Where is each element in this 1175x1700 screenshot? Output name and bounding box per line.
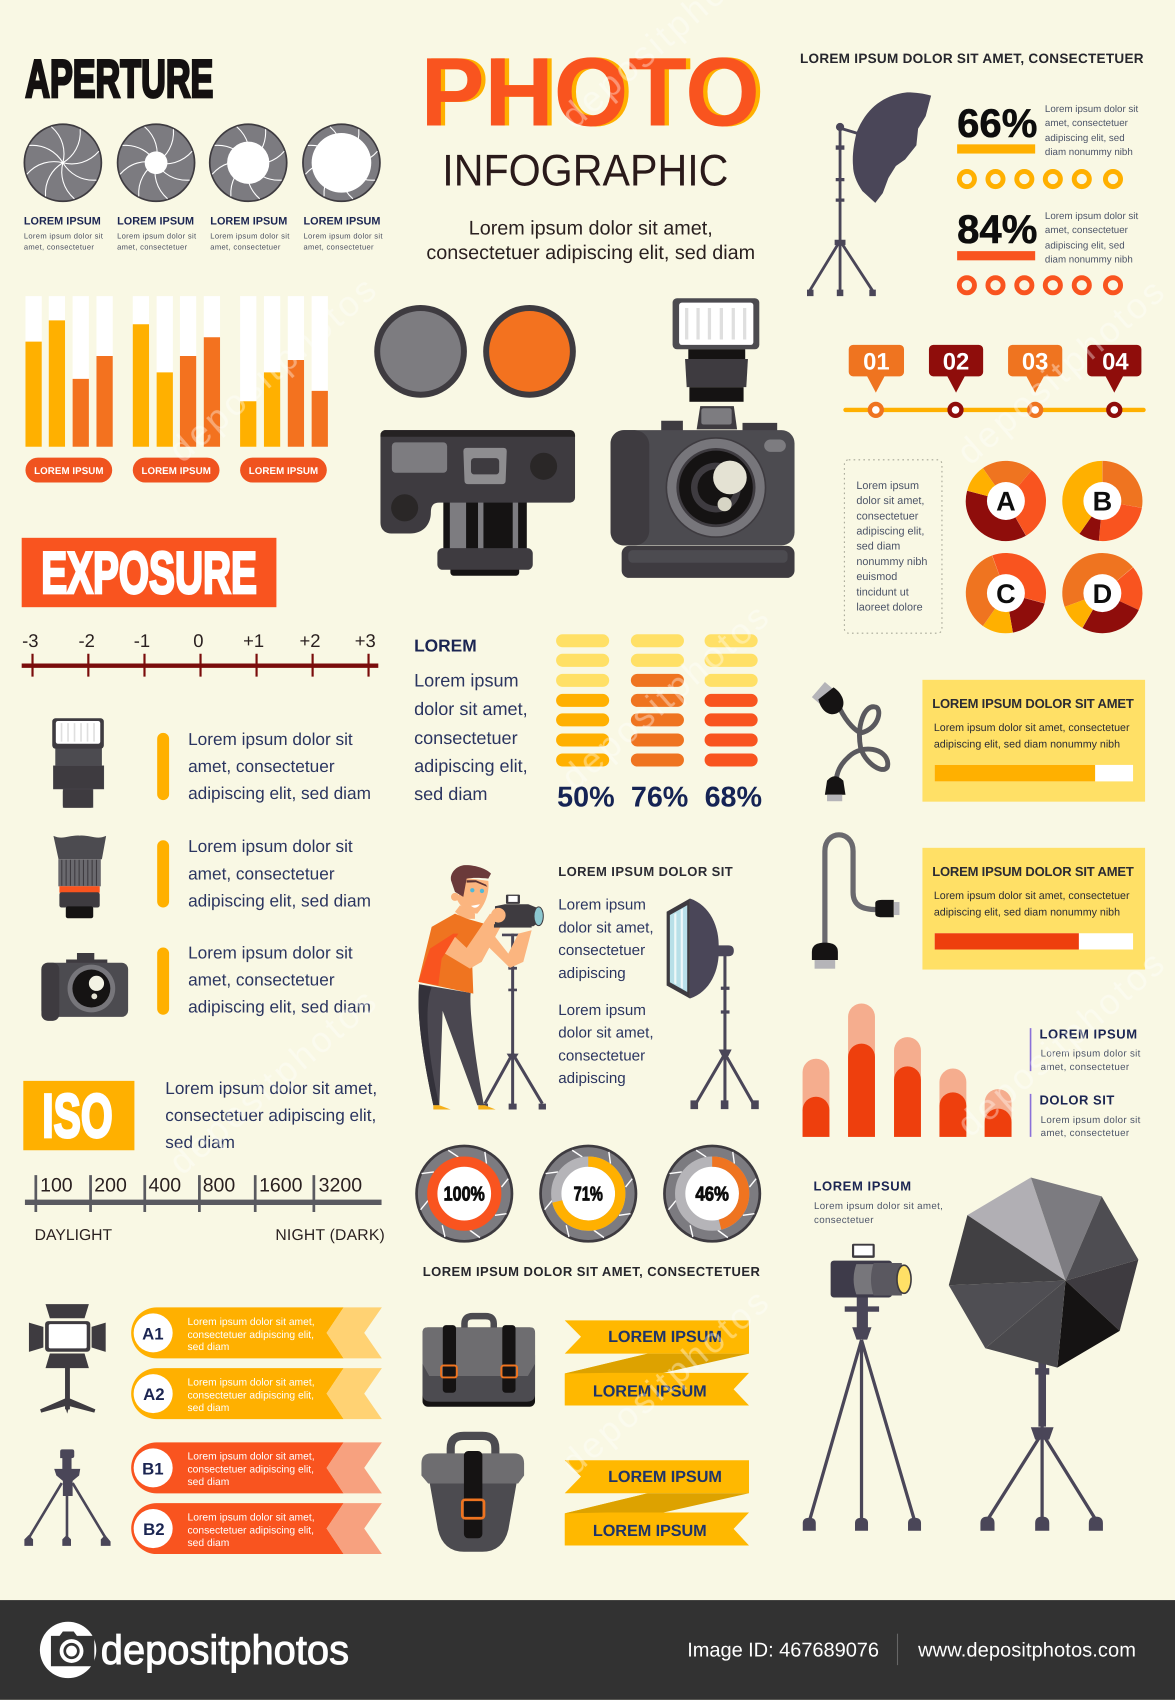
gauge 46%: 46% [695, 1182, 729, 1205]
watermarks: depositphotos [949, 943, 1171, 1144]
caption under gauges: LOREM IPSUM DOLOR SIT AMET, CONSECTETUER [423, 1264, 760, 1279]
ribbon A1: A1 [142, 1325, 164, 1344]
gauge 71%: 71% [574, 1182, 603, 1205]
dotted text box: sed diam [856, 541, 900, 553]
text: photographer copy: Lorem ipsum [558, 896, 646, 913]
text: lorem block: Lorem ipsum [414, 670, 519, 691]
stat: 84%: diam nonummy nibh [1045, 254, 1133, 265]
icon: camera top view [380, 430, 575, 576]
title: INFOGRAPHIC [442, 145, 728, 195]
column 50%: 50% [557, 781, 615, 813]
dotted text box: Lorem ipsum [856, 480, 919, 492]
exposure scale: -2 [79, 631, 95, 651]
ribbon A2 [131, 1368, 382, 1419]
yellow banners: lower pair [565, 1460, 749, 1545]
bar chart group 3 [240, 296, 328, 483]
exposure scale [22, 631, 378, 677]
icon: compact camera [41, 953, 128, 1021]
yellow banners: upper pair [565, 1320, 749, 1406]
gauge 100% [417, 1146, 512, 1241]
icon: cable 1 [812, 682, 888, 801]
list: lens accessories: amet, consectetuer [188, 865, 335, 884]
heading: exposure: EXPOSURE [41, 540, 257, 606]
stat: 84%: adipiscing elit, sed [1045, 240, 1125, 251]
aperture small [118, 124, 195, 201]
dotted text box [844, 460, 942, 633]
text: camera caption [814, 1178, 943, 1225]
donut D: D [1093, 579, 1112, 609]
aperture captions: Lorem ipsum dolor sit [24, 232, 103, 241]
list: lens accessories: Lorem ipsum dolor sit [188, 731, 353, 749]
text: photographer copy: LOREM IPSUM DOLOR SIT [558, 864, 733, 879]
ISO scale: 1600 [259, 1174, 302, 1196]
dotted text box: nonummy nibh [856, 556, 927, 568]
panel: yellow progress 2 [922, 848, 1145, 970]
ribbon B2: Lorem ipsum dolor sit amet, [188, 1512, 315, 1524]
text: camera caption: LOREM IPSUM [814, 1178, 911, 1194]
image id: Image ID: 467689076 [687, 1638, 879, 1661]
ribbon A1: sed diam [188, 1342, 229, 1353]
ribbon B1: sed diam [188, 1477, 229, 1488]
heading: ISO: ISO [42, 1082, 113, 1151]
legend: Lorem ipsum dolor sit [1041, 1048, 1141, 1059]
pin 02 [929, 345, 983, 416]
icon: camera on tripod [803, 1244, 921, 1531]
aperture medium [210, 124, 287, 201]
text: photographer copy: dolor sit amet, [558, 918, 654, 936]
pin 01 [849, 345, 904, 416]
pin 04: 04 [1102, 348, 1129, 375]
panel: yellow progress 2: Lorem ipsum dolor sit amet, consectetuer [934, 890, 1130, 902]
timeline [843, 345, 1146, 416]
list: lens accessories: amet, consectetuer [188, 758, 335, 776]
aperture captions: LOREM IPSUM [304, 216, 380, 228]
title: PHOTO [421, 39, 760, 147]
panel: yellow progress 1: Lorem ipsum dolor sit amet, consectetuer [934, 722, 1130, 734]
exposure scale: 0 [193, 631, 203, 651]
ISO scale: 100 [40, 1174, 73, 1196]
donut C [965, 552, 1047, 634]
stat: 66%: adipiscing elit, sed [1045, 132, 1125, 143]
aperture captions: amet, consectetuer [24, 244, 95, 252]
text: photographer copy: Lorem ipsum [558, 1001, 646, 1018]
gauge 46% [664, 1146, 760, 1241]
ribbon A2: consectetuer adipiscing elit, [188, 1390, 314, 1402]
text: photographer copy: consectetuer [558, 941, 645, 958]
yellow banners: upper pair: LOREM IPSUM [593, 1382, 707, 1401]
dotted text box: dolor sit amet, [856, 496, 924, 507]
pin 01: 01 [863, 348, 890, 375]
ribbon B2 [131, 1503, 382, 1554]
text: photographer copy [558, 864, 733, 1086]
text: lorem block [414, 638, 528, 804]
bar chart group 2: LOREM IPSUM [141, 465, 211, 476]
exposure scale: +3 [355, 631, 376, 651]
icon: camera bag [421, 1436, 524, 1552]
ribbon A2: sed diam [188, 1402, 229, 1414]
column 68% [705, 634, 762, 813]
aperture captions: Lorem ipsum dolor sit [210, 232, 290, 241]
stat: 84%: Lorem ipsum dolor sit [1045, 210, 1139, 221]
stat: 66%: diam nonummy nibh [1045, 147, 1133, 157]
title: PHOTO [425, 39, 764, 147]
yellow banners: upper pair: LOREM IPSUM [608, 1328, 722, 1346]
text: camera caption: Lorem ipsum dolor sit amet, [814, 1200, 943, 1211]
ribbon B2: consectetuer adipiscing elit, [188, 1525, 314, 1537]
exposure scale: +2 [300, 631, 321, 651]
bar chart group 2 [133, 296, 220, 483]
aperture closed [24, 124, 101, 201]
list: lens accessories: adipiscing elit, sed diam [188, 785, 371, 803]
text: camera caption: consectetuer [814, 1214, 874, 1225]
ribbon B1: B1 [142, 1460, 164, 1479]
ISO description: sed diam [165, 1134, 235, 1152]
gauge 100%: 100% [444, 1182, 485, 1205]
aperture diagrams [24, 124, 380, 201]
rounded bar chart [803, 1003, 1012, 1137]
list: lens accessories [157, 731, 371, 1017]
list: lens accessories: amet, consectetuer [188, 971, 335, 990]
ISO scale: NIGHT (DARK) [275, 1227, 385, 1245]
ISO scale: 200 [94, 1174, 127, 1196]
icon: flash unit [52, 718, 104, 808]
dotted text box: laoreet dolore [856, 602, 923, 614]
watermarks [161, 0, 1171, 1482]
title description [426, 216, 755, 264]
bar chart group 1: LOREM IPSUM [34, 465, 104, 476]
text: lorem block: adipiscing elit, [414, 756, 528, 776]
list: lens accessories: Lorem ipsum dolor sit [188, 944, 353, 963]
icon: briefcase [423, 1316, 535, 1407]
ISO description: Lorem ipsum dolor sit amet, [165, 1080, 377, 1098]
donut D [1061, 552, 1144, 634]
yellow banners: lower pair: LOREM IPSUM [608, 1468, 722, 1486]
ISO scale [25, 1174, 385, 1245]
aperture captions: LOREM IPSUM [210, 216, 287, 228]
title description: consectetuer adipiscing elit, sed diam [426, 241, 755, 264]
icon: umbrella light stand [807, 92, 931, 296]
text: photographer copy: dolor sit amet, [558, 1023, 654, 1041]
panel: yellow progress 2: adipiscing elit, sed diam nonummy nibh [934, 907, 1120, 919]
pill-stack chart [556, 634, 762, 813]
watermarks: depositphotos [553, 596, 776, 797]
watermarks: depositphotos [161, 981, 383, 1182]
column 76% [631, 634, 688, 813]
list: lens accessories: adipiscing elit, sed diam [188, 892, 371, 911]
heading: exposure [22, 538, 276, 607]
stat: 84%: 84% [957, 207, 1037, 252]
ISO scale: 3200 [319, 1174, 362, 1196]
ISO description [165, 1080, 377, 1152]
watermarks: depositphotos [553, 1281, 776, 1482]
ribbon A2: A2 [143, 1386, 165, 1404]
panel: yellow progress 1: adipiscing elit, sed diam nonummy nibh [934, 739, 1120, 751]
donut A: A [996, 487, 1016, 517]
icon: camera with flash [611, 298, 795, 578]
ISO scale: 400 [149, 1174, 181, 1196]
logo wordmark: depositphotos [101, 1628, 349, 1674]
text: lorem block: consectetuer [414, 728, 518, 748]
panel: yellow progress 1: LOREM IPSUM DOLOR SIT AMET [932, 696, 1135, 711]
aperture wide [303, 124, 380, 201]
legend [1030, 1027, 1141, 1138]
ribbon B2: B2 [143, 1521, 165, 1539]
donut B: B [1093, 487, 1112, 517]
footer [0, 1600, 1175, 1700]
logo mark [40, 1622, 96, 1678]
icon: cable 2 [812, 835, 899, 969]
ribbon B2: sed diam [188, 1537, 229, 1549]
legend: DOLOR SIT [1040, 1093, 1115, 1108]
aperture captions: LOREM IPSUM [117, 216, 194, 228]
pin 02: 02 [943, 348, 969, 375]
text: lorem block: LOREM [414, 638, 477, 656]
ribbon B1: consectetuer adipiscing elit, [188, 1464, 314, 1476]
icon: small tripod [24, 1449, 111, 1546]
ISO description: consectetuer adipiscing elit, [165, 1107, 376, 1125]
legend: Lorem ipsum dolor sit [1041, 1114, 1141, 1125]
list: lens accessories: adipiscing elit, sed diam [188, 999, 371, 1017]
legend: amet, consectetuer [1041, 1127, 1129, 1138]
icon: softbox on stand [667, 899, 759, 1109]
site url: www.depositphotos.com [917, 1638, 1136, 1661]
icon: studio light [29, 1304, 106, 1414]
stat: 84%: amet, consectetuer [1045, 225, 1128, 235]
text: lorem block: sed diam [414, 784, 487, 804]
ribbon B1: Lorem ipsum dolor sit amet, [188, 1451, 315, 1463]
text: lorem block: dolor sit amet, [414, 699, 528, 719]
dotted text box: euismod [856, 571, 897, 583]
ribbon A1: consectetuer adipiscing elit, [188, 1329, 314, 1341]
list: lens accessories: Lorem ipsum dolor sit [188, 838, 353, 857]
exposure scale: +1 [243, 631, 264, 651]
watermarks: depositphotos [161, 269, 383, 470]
column 50% [556, 634, 615, 813]
stat: 66%: Lorem ipsum dolor sit [1045, 103, 1139, 114]
aperture captions: amet, consectetuer [117, 244, 188, 252]
watermarks: depositphotos [949, 271, 1171, 472]
exposure scale: -1 [134, 631, 150, 651]
ribbon B1 [131, 1442, 382, 1493]
title description: Lorem ipsum dolor sit amet, [469, 216, 713, 239]
bar chart group 3: LOREM IPSUM [249, 465, 318, 476]
dotted text box: adipiscing elit, [856, 526, 924, 538]
column 68%: 68% [705, 781, 762, 813]
bar charts [25, 296, 328, 483]
icon: zoom lens [53, 836, 106, 918]
panel: yellow progress 2: LOREM IPSUM DOLOR SIT AMET [932, 864, 1135, 879]
dotted text box: tincidunt ut [856, 587, 909, 599]
title [421, 39, 764, 195]
illustration: photographer with tripod [418, 865, 546, 1110]
lens filters [377, 308, 573, 395]
stat: 66%: amet, consectetuer [1045, 117, 1128, 128]
aperture captions: amet, consectetuer [210, 244, 281, 252]
text: photographer copy: adipiscing [558, 1069, 626, 1086]
text: photographer copy: adipiscing [558, 964, 626, 981]
ribbon A1 [131, 1307, 382, 1358]
header: top right: LOREM IPSUM DOLOR SIT AMET, CONSECTETUER [800, 51, 1144, 66]
panel: yellow progress 1 [922, 680, 1145, 802]
aperture captions: LOREM IPSUM [24, 216, 101, 228]
aperture captions [24, 216, 383, 252]
stat: 84% [957, 207, 1139, 293]
donut A [965, 460, 1047, 542]
donut B [1062, 460, 1143, 542]
gauge 71% [541, 1146, 636, 1241]
ribbon A2: Lorem ipsum dolor sit amet, [188, 1377, 315, 1389]
legend: amet, consectetuer [1041, 1061, 1129, 1072]
text: photographer copy: consectetuer [558, 1046, 645, 1064]
bar chart group 1 [25, 296, 113, 483]
dotted text box: consectetuer [856, 511, 919, 523]
aperture captions: Lorem ipsum dolor sit [304, 232, 383, 241]
aperture captions: Lorem ipsum dolor sit [117, 232, 196, 241]
legend: LOREM IPSUM [1040, 1027, 1137, 1042]
donut C: C [996, 579, 1016, 609]
aperture captions: amet, consectetuer [304, 244, 374, 252]
stat: 66%: 66% [957, 101, 1037, 145]
pin 03: 03 [1022, 348, 1048, 375]
icon: octabox on stand [949, 1177, 1138, 1531]
pin 03 [1008, 345, 1062, 416]
exposure scale: -3 [22, 631, 39, 651]
yellow banners: lower pair: LOREM IPSUM [593, 1522, 707, 1540]
ISO scale: 800 [203, 1174, 235, 1196]
pin 04 [1087, 345, 1141, 416]
column 76%: 76% [631, 781, 688, 813]
stat: 66% [957, 101, 1139, 187]
ribbon A1: Lorem ipsum dolor sit amet, [188, 1316, 315, 1328]
heading: aperture: APERTURE [25, 50, 213, 109]
ISO scale: DAYLIGHT [35, 1227, 112, 1245]
